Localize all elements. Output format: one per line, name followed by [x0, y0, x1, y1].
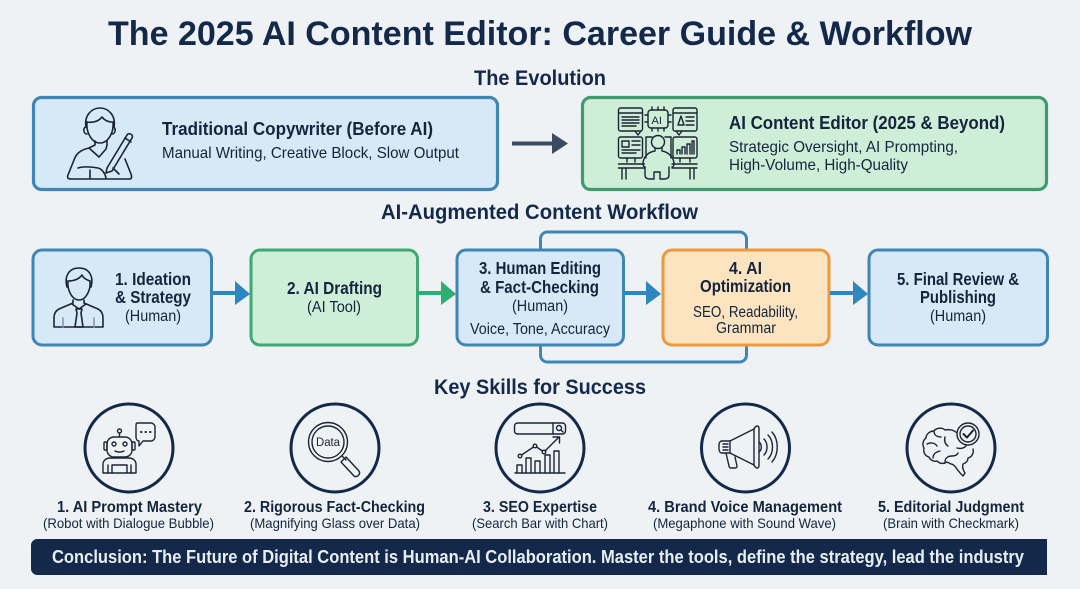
icon: robot with dialogue bubble	[103, 423, 155, 473]
panel: traditional copywriter	[34, 98, 498, 190]
conclusion banner	[31, 539, 1047, 575]
text: skill 3 note: (Search Bar with Chart)	[472, 515, 608, 531]
text: skill 1 name: 1. AI Prompt Mastery	[57, 499, 202, 516]
arrow: step 3 to 4	[624, 281, 661, 305]
text: step 4 title	[700, 258, 791, 296]
text: skill 4 note: (Megaphone with Sound Wave)	[653, 515, 836, 531]
text: step 5 role: (Human)	[930, 308, 986, 325]
icon: copywriter writing with pen	[68, 108, 132, 179]
text: skill 4 name: 4. Brand Voice Management	[648, 499, 843, 516]
arrow: step 1 to 2	[212, 281, 250, 305]
arrow: step 4 to 5	[830, 281, 868, 305]
heading: key skills: Key Skills for Success	[434, 376, 646, 399]
arrow: step 2 to 3	[418, 281, 456, 305]
text: ai content editor details: Strategic Oversight, AI Prompting,	[729, 139, 958, 156]
text: step 2 role: (AI Tool)	[307, 299, 361, 316]
text: ai content editor details	[729, 139, 958, 174]
arrow: evolution	[512, 133, 568, 154]
text: step 4 details: SEO, Readability,	[693, 304, 798, 321]
icon: person with tie	[54, 268, 103, 327]
text: ai content editor title: AI Content Editor (2025 & Beyond)	[729, 112, 1005, 133]
title: The 2025 AI Content Editor: Career Guide & Workflow	[108, 15, 973, 53]
text: step 4 title: 4. AI	[729, 258, 762, 278]
icon: brain with checkmark	[923, 423, 979, 476]
icon: magnifying glass over data: Data	[316, 437, 341, 449]
icon: magnifying glass over data	[308, 422, 360, 477]
text: step 3 title	[479, 258, 601, 297]
skill 4: brand voice management	[648, 404, 843, 531]
text: step 4 details	[693, 304, 798, 337]
text: step 3 title: 3. Human Editing	[479, 258, 601, 278]
text: step 1 title	[115, 269, 191, 307]
text: traditional copywriter details: Manual Writing, Creative Block, Slow Output	[162, 145, 460, 162]
icon: editor at desk with AI screens: AI	[652, 115, 662, 127]
heading: the evolution: The Evolution	[474, 67, 606, 90]
step 3: human editing	[457, 250, 624, 345]
text: skill 5 name: 5. Editorial Judgment	[878, 499, 1025, 516]
text: ai content editor details: High-Volume, High-Quality	[729, 157, 908, 174]
skill 5: editorial judgment	[878, 404, 1025, 531]
text: traditional copywriter title: Traditional Copywriter (Before AI)	[162, 118, 433, 139]
step 4: ai optimization	[663, 250, 829, 345]
step 2: ai drafting	[251, 250, 418, 345]
text: step 5 title: Publishing	[920, 287, 996, 307]
icon: megaphone with sound wave	[719, 426, 777, 468]
text: step 3 details: Voice, Tone, Accuracy	[470, 321, 610, 338]
text: step 3 title: & Fact-Checking	[480, 277, 599, 297]
text: step 1 title: & Strategy	[115, 287, 191, 307]
icon: search bar with chart	[514, 423, 566, 473]
text: step 2 title: 2. AI Drafting	[287, 278, 382, 298]
heading: workflow: AI-Augmented Content Workflow	[381, 201, 699, 224]
text: skill 3 name: 3. SEO Expertise	[483, 499, 597, 516]
text: step 3 role: (Human)	[512, 298, 568, 315]
step 1: ideation and strategy	[33, 250, 212, 345]
text: step 5 title: 5. Final Review &	[897, 269, 1019, 289]
skill 1: ai prompt mastery	[43, 404, 214, 531]
text: skill 2 note: (Magnifying Glass over Data)	[250, 515, 420, 531]
text: step 4 details: Grammar	[716, 320, 776, 337]
text: skill 5 note: (Brain with Checkmark)	[883, 515, 1019, 531]
skill 2: rigorous fact-checking	[244, 404, 425, 531]
text: step 5 title	[897, 269, 1019, 307]
skill 3: seo expertise	[472, 404, 608, 531]
loop connector: between steps 3 and 4	[540, 232, 746, 362]
icon: editor at desk with AI screens	[618, 107, 697, 179]
text: step 1 title: 1. Ideation	[115, 269, 191, 289]
text: skill 2 name: 2. Rigorous Fact-Checking	[244, 499, 425, 516]
text: skill 1 note: (Robot with Dialogue Bubble)	[43, 515, 214, 531]
text: step 1 role: (Human)	[125, 308, 181, 325]
step 5: final review	[869, 250, 1048, 345]
text: step 4 title: Optimization	[700, 276, 791, 296]
panel: ai content editor	[582, 98, 1046, 190]
